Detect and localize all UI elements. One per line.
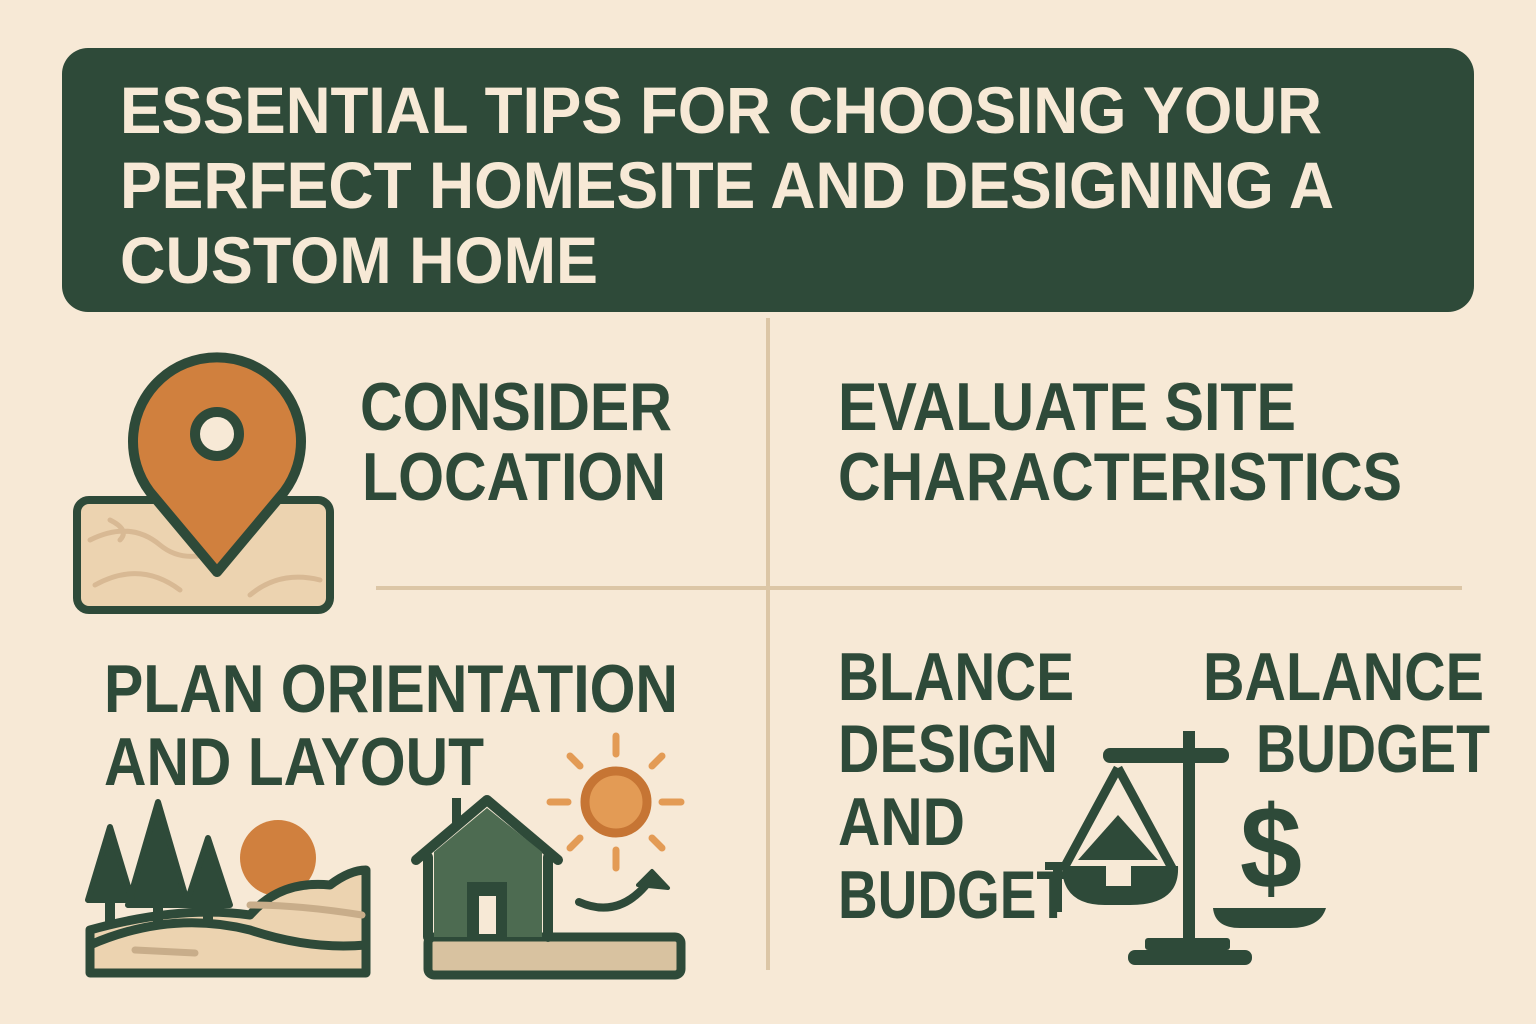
title: PERFECT HOMESITE AND DESIGNING A	[120, 148, 1334, 222]
heading: consider location: LOCATION	[362, 439, 666, 515]
heading: consider location	[360, 369, 672, 515]
icon: landscape with trees	[88, 802, 366, 973]
heading: plan orientation: PLAN ORIENTATION	[104, 651, 678, 727]
heading: consider location: CONSIDER	[360, 369, 672, 445]
icon: house with sun	[416, 736, 681, 975]
heading: balance budget: BUDGET	[1256, 711, 1490, 787]
icon: location pin on map	[77, 357, 330, 610]
heading: evaluate site characteristics	[838, 369, 1402, 515]
heading: balance budget	[1203, 639, 1490, 787]
heading: balance design and budget: BLANCE	[838, 639, 1074, 715]
heading: evaluate site characteristics: CHARACTERISTICS	[838, 439, 1402, 515]
heading: balance design and budget: AND	[838, 784, 965, 860]
icon: dollar sign: $	[1240, 782, 1302, 914]
heading: evaluate site characteristics: EVALUATE SITE	[838, 369, 1296, 445]
icon: balance scale	[1045, 731, 1326, 965]
heading: balance budget: BALANCE	[1203, 639, 1484, 715]
title	[62, 48, 1474, 312]
heading: balance design and budget: DESIGN	[838, 711, 1058, 787]
title: ESSENTIAL TIPS FOR CHOOSING YOUR	[120, 73, 1322, 147]
heading: balance design and budget: BUDGET	[838, 857, 1070, 933]
heading: balance design and budget	[838, 639, 1074, 933]
heading: plan orientation	[104, 651, 678, 800]
arrow	[579, 880, 650, 908]
heading: plan orientation: AND LAYOUT	[104, 724, 484, 800]
title: CUSTOM HOME	[120, 223, 598, 297]
